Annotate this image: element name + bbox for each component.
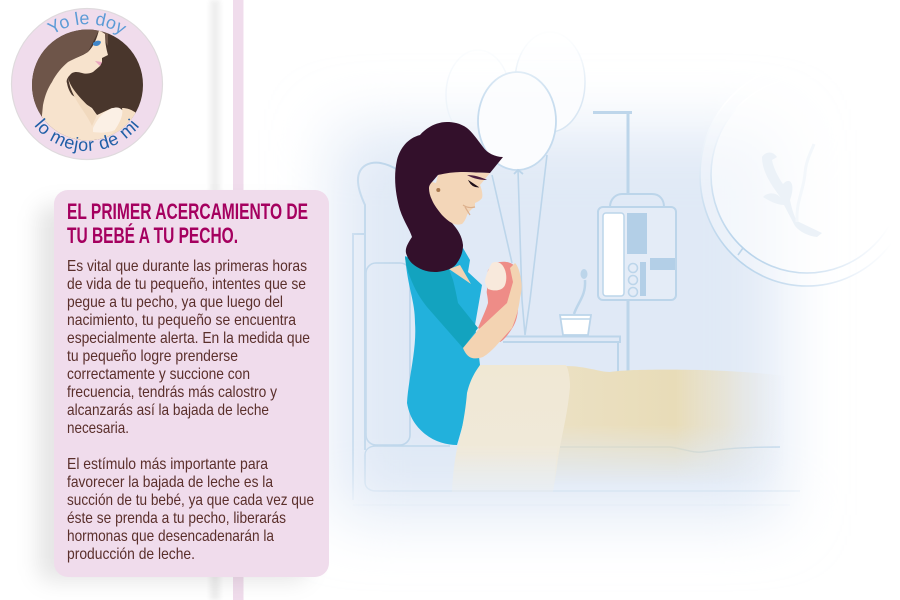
paragraph one: nacimiento, tu pequeño se encuentra: [67, 312, 296, 329]
paragraph one: de vida de tu pequeño, intentes que se: [67, 276, 306, 293]
earring: [436, 188, 440, 192]
scene background glow: [335, 130, 780, 515]
chest skin: [449, 265, 471, 284]
mouth: [463, 205, 475, 215]
logo fold shading: [68, 78, 97, 126]
paragraph one: [67, 258, 310, 437]
paragraph two: El estímulo más importante para: [67, 456, 268, 473]
paragraph one: correctamente y succione con: [67, 366, 250, 383]
blanket left: [452, 365, 570, 492]
eyebrow: [467, 175, 487, 180]
side table with cup: [503, 269, 620, 372]
baby head: [485, 262, 506, 290]
dress shading: [405, 257, 478, 348]
paragraph one: tu pequeño logre prenderse: [67, 348, 238, 365]
logo baby: [93, 107, 123, 133]
paragraph one: especialmente alerta. En la medida que: [67, 330, 310, 347]
logo eye: [93, 41, 101, 46]
face: [429, 172, 490, 225]
panel shadow: [38, 205, 308, 581]
text panel: [54, 190, 329, 577]
woman holding baby: [395, 122, 522, 445]
IV pole: [593, 112, 632, 372]
arm: [463, 263, 522, 358]
paragraph one: frecuencia, tendrás más calostro y: [67, 384, 277, 401]
hospital room line art: [353, 32, 800, 505]
paragraph one: pegue a tu pecho, ya que luego del: [67, 294, 283, 311]
window with ornament: [700, 64, 900, 286]
logo baby wrap: [112, 108, 136, 134]
logo bottom text: lo mejor de mi: [34, 118, 139, 154]
blanket right: [556, 366, 762, 477]
heading: EL PRIMER ACERCAMIENTO DE: [67, 199, 308, 224]
paragraph one: alcanzarás así la bajada de leche: [67, 402, 269, 419]
logo mother: [40, 30, 135, 150]
paragraph two: [67, 456, 314, 563]
dress: [405, 248, 482, 445]
paragraph two: succión de tu bebé, ya que cada vez que: [67, 492, 314, 509]
IV monitor: [598, 194, 676, 300]
paragraph one: necesaria.: [67, 420, 129, 437]
baby blanket: [478, 262, 519, 342]
paragraph two: favorecer la bajada de leche es la: [67, 474, 273, 491]
grey background strip: [210, 0, 220, 600]
logo top text: Yo le doy: [46, 12, 126, 35]
closed eye: [469, 181, 478, 187]
heading: [67, 199, 308, 248]
armchair and bed outlines: [353, 163, 800, 505]
logo lips: [95, 61, 102, 66]
hair: [395, 122, 503, 272]
paragraph two: hormonas que desencadenarán la: [67, 528, 274, 545]
paragraph one: Es vital que durante las primeras horas: [67, 258, 307, 275]
logo illustration: [32, 30, 136, 140]
paragraph two: éste se prenda a tu pecho, liberarás: [67, 510, 286, 527]
logo dark circle: [32, 30, 143, 140]
heading: TU BEBÉ A TU PECHO.: [67, 223, 238, 248]
paragraph two: producción de leche.: [67, 546, 195, 563]
logo badge: [11, 8, 163, 160]
balloons: [446, 32, 585, 335]
logo hair: [32, 30, 108, 122]
pink vertical bar: [233, 0, 244, 600]
